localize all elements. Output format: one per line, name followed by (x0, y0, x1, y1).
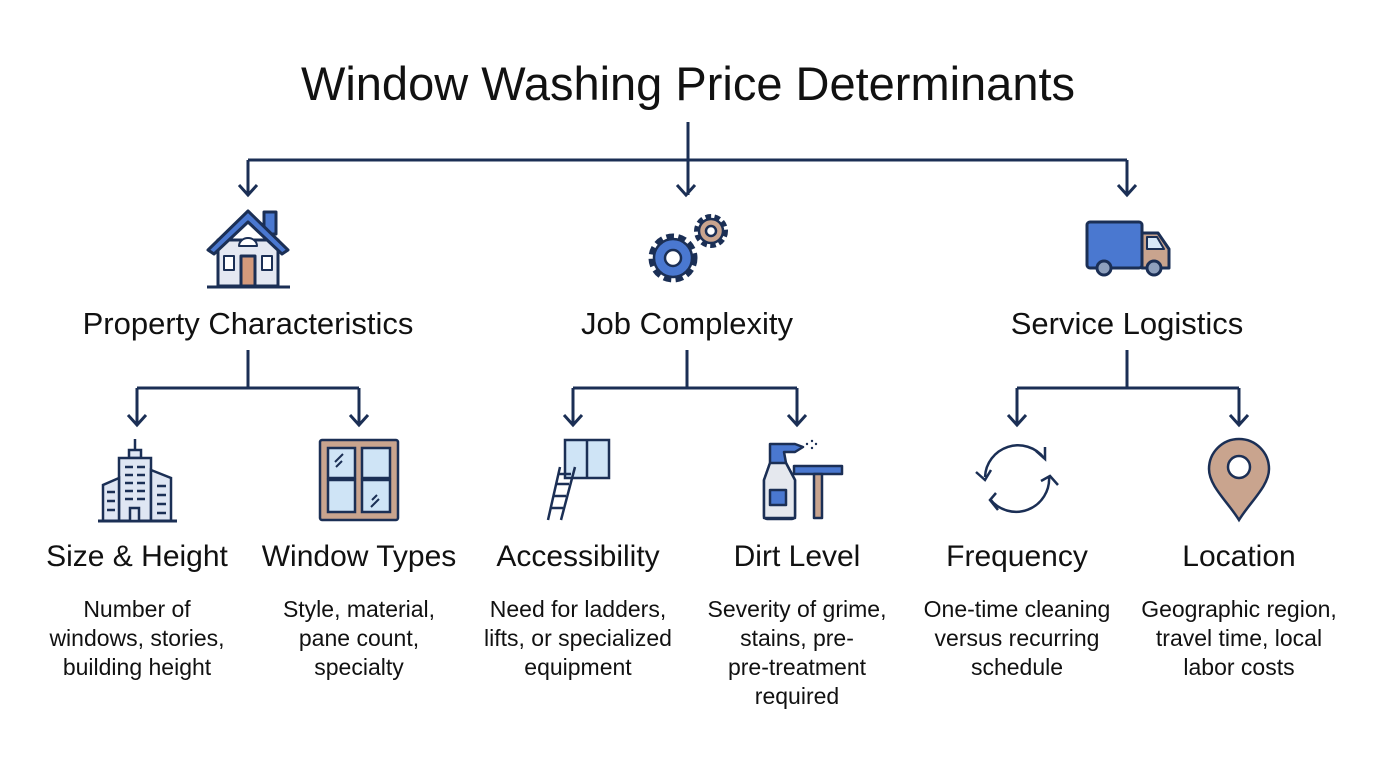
heading: Property Characteristics: Property Characteristics (83, 306, 413, 341)
text block: Location: travel time, local (1156, 625, 1322, 651)
text block: Frequency: schedule (971, 654, 1063, 680)
heading: Service Logistics: Service Logistics (1011, 306, 1243, 341)
text block: Size & Height: Number of (83, 596, 191, 622)
arrow: top connector (239, 122, 1136, 195)
text block: Size & Height: building height (63, 654, 212, 680)
title: Window Washing Price Determinants (301, 57, 1075, 110)
icon: gears (653, 218, 724, 278)
text block: Window Types (262, 540, 456, 680)
text block: Accessibility: equipment (524, 654, 632, 680)
text block: Size & Height (46, 540, 229, 680)
text block: Location (1141, 540, 1337, 680)
text block: Accessibility: Need for ladders, (490, 596, 666, 622)
text block: Size & Height: Size & Height (46, 540, 229, 573)
text block: Dirt Level: Severity of grime, (708, 596, 886, 622)
text block: Accessibility: Accessibility (496, 540, 660, 573)
text block: Frequency: Frequency (946, 540, 1088, 573)
icon: cycle arrows (976, 445, 1058, 512)
text block: Window Types: pane count, (299, 625, 419, 651)
icon: house (207, 211, 290, 287)
text block: Accessibility (484, 540, 672, 680)
heading: Job Complexity: Job Complexity (581, 306, 793, 341)
text block: Frequency: One-time cleaning (924, 596, 1110, 622)
text block: Dirt Level: required (755, 683, 839, 709)
text block: Frequency: versus recurring (935, 625, 1099, 651)
text block: Window Types: Style, material, (283, 596, 435, 622)
text block: Window Types: Window Types (262, 540, 456, 573)
text block: Dirt Level: pre-treatment (728, 654, 867, 680)
text block: Location: Location (1182, 540, 1296, 573)
text block: Dirt Level: stains, pre- (740, 625, 854, 651)
arrow: sub connectors (128, 350, 1248, 425)
text block: Window Types: specialty (314, 654, 404, 680)
text block: Size & Height: windows, stories, (48, 625, 225, 651)
text block: Dirt Level (708, 540, 886, 709)
text block: Frequency (924, 540, 1110, 680)
icon: window (320, 440, 398, 520)
text block: Dirt Level: Dirt Level (734, 540, 860, 573)
icon: building (98, 439, 177, 521)
icon: ladder (548, 440, 609, 520)
icon: truck (1087, 222, 1169, 275)
icon: spray and squeegee (764, 440, 842, 519)
text block: Location: labor costs (1183, 654, 1295, 680)
text block: Accessibility: lifts, or specialized (484, 625, 672, 651)
text block: Location: Geographic region, (1141, 596, 1337, 622)
icon: location pin (1209, 439, 1269, 520)
